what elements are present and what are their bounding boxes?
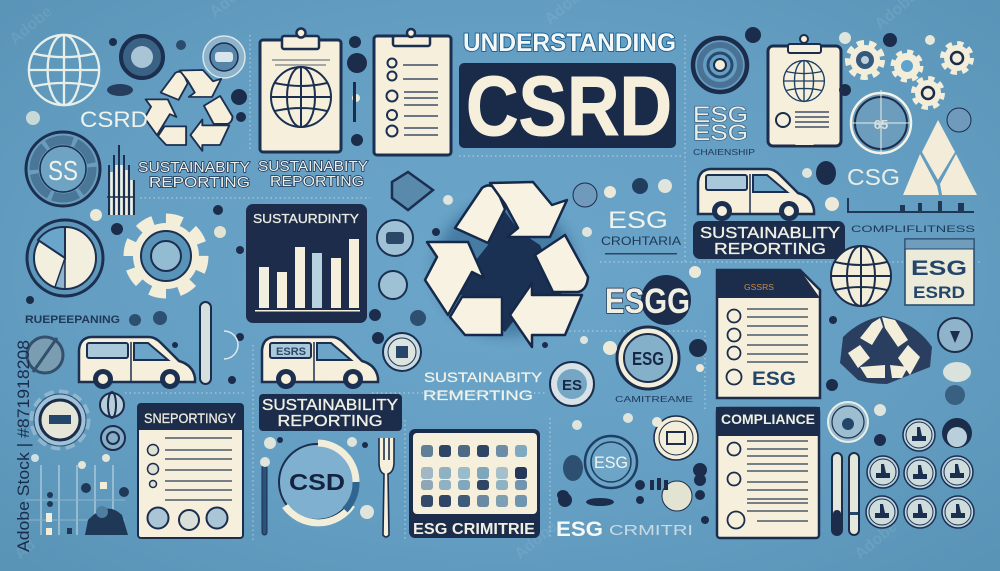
text: sustainabity remerting: REMERTING <box>423 388 533 403</box>
label: CSG: CSG <box>847 164 900 190</box>
icon: lower-left swirls <box>100 392 125 450</box>
text: sustainabity remerting: SUSTAINABITY <box>424 370 542 385</box>
icon: wireframe globe <box>29 35 99 105</box>
icon: ESG outline circle <box>585 436 637 488</box>
icon: large recycle <box>425 182 588 347</box>
icon: dark recycle blob <box>840 316 932 384</box>
text: sustainability reporting 1 <box>138 159 250 191</box>
panel: sustainability bar chart <box>246 204 367 323</box>
icon: crossed circle <box>27 337 63 373</box>
small text: distorted caption left: RUEPEEPANING <box>25 314 120 326</box>
panel: clipboard with globe <box>260 28 341 152</box>
icon: pill marker <box>200 302 267 535</box>
panel: compliance document: COMPLIANCE <box>721 412 815 427</box>
icon: lower-left gear <box>33 393 87 447</box>
icon: triangles <box>903 120 977 195</box>
title panel: CSRD: CSRD <box>466 59 672 153</box>
badge column near chart <box>377 172 433 371</box>
label: sustainability reporting 4 <box>693 221 845 259</box>
label: sustainability reporting 3 <box>259 394 402 431</box>
dotted section dividers <box>125 35 980 540</box>
icon: ESG outline circle: ESG <box>594 453 628 472</box>
icon: gear cluster <box>848 43 971 107</box>
icon: pie chart <box>27 220 103 296</box>
watermark: Adobe <box>852 518 901 563</box>
label: sustainability reporting 3: SUSTAINABILITY <box>262 397 398 414</box>
icon: ESG ring <box>617 327 679 389</box>
icon: cream badges <box>654 416 698 511</box>
icon: van 3 <box>698 169 814 221</box>
panel: ESG criteria calendar <box>409 429 540 538</box>
watermark: Adobe <box>7 3 56 48</box>
label: ESCG badge <box>605 275 691 325</box>
title: understanding: UNDERSTANDING <box>463 29 676 57</box>
panel: reporting document: SNEPORTINGY <box>144 411 236 426</box>
icon: vertical pills <box>832 453 859 535</box>
icon: ES badge: ES <box>562 377 582 394</box>
panel: ESG ESRD card: ESRD <box>913 283 965 302</box>
panel: clipboard checklist <box>374 29 451 155</box>
panel: reporting document <box>138 404 243 538</box>
source credit: Adobe Stock | #871918208 <box>14 340 33 552</box>
icon: gear <box>129 219 203 293</box>
text: sustainability reporting 1: REPORTING <box>149 174 250 191</box>
text: ESG crmitri: CRMITRI <box>609 523 693 539</box>
text: stacked ESG: ESG <box>693 102 748 127</box>
icon: van 2 <box>262 337 378 389</box>
text: stacked ESG <box>693 102 755 157</box>
panel: ESG criteria calendar: ESG CRIMITRIE <box>413 521 535 538</box>
icon: van 2: ESRS <box>276 346 306 358</box>
watermark: Adobe <box>512 518 561 563</box>
panel: ESG document: ESG <box>752 369 796 390</box>
chart bars <box>255 239 360 312</box>
icon: ES badge <box>550 362 594 406</box>
icon: small recycle <box>145 70 233 151</box>
small text and bars right: COMPLIFLITNESS <box>851 224 975 234</box>
icon: crosshair circle: 65 <box>874 117 888 132</box>
text: sustainability reporting 2: REPORTING <box>270 173 364 190</box>
small text and bars right <box>847 198 975 234</box>
icon: fork <box>379 438 394 537</box>
text: sustainabity remerting <box>423 370 542 403</box>
panel: sustainability bar chart: SUSTAURDINTY <box>253 212 360 226</box>
icon: ESG ring: ESG <box>632 349 664 369</box>
text: stacked ESG: CHAIENSHIP <box>693 148 755 157</box>
label: CSRD: CSRD <box>80 107 148 132</box>
icon: right badges <box>828 318 972 448</box>
panel: tablet with globe <box>768 35 841 146</box>
label: sustainability reporting 3: REPORTING <box>278 413 382 430</box>
panel: ESG ESRD card <box>905 239 974 305</box>
panel: compliance document <box>716 407 820 538</box>
text: ESG criteria cluster: CROHTARIA <box>601 234 681 248</box>
label: sustainability reporting 4: REPORTING <box>714 241 826 258</box>
lower-left chart clutter <box>25 454 129 535</box>
icon: crosshair circle <box>850 90 912 155</box>
icon: globe <box>831 246 891 306</box>
icon: CSD ring: CSD <box>289 469 345 495</box>
icon: CSD ring <box>279 443 356 523</box>
panel: ESG document <box>717 270 820 398</box>
icon: thumb badge grid <box>866 419 974 528</box>
text: sustainability reporting 2: SUSTAINABITY <box>258 158 368 175</box>
panel: ESG ESRD card: ESG <box>911 257 967 280</box>
text: ESG crmitri: ESG <box>556 518 603 541</box>
label: sustainability reporting 4: SUSTAINABLITY <box>700 225 840 242</box>
text: ESG criteria cluster: ESG <box>608 207 668 234</box>
small text: commitment line: CAMITREAME <box>615 395 693 404</box>
label: ESCG badge: ESGG <box>605 282 690 321</box>
text: sustainability reporting 2 <box>258 158 368 190</box>
icon: dark badge <box>121 36 163 78</box>
text: ESG criteria cluster <box>601 207 681 254</box>
icon: van 1 <box>79 337 195 389</box>
icon: SS dial: SS <box>48 155 78 186</box>
icon: target rings <box>693 38 747 92</box>
icon: tall bars <box>107 145 135 215</box>
icon: light badge <box>203 36 245 78</box>
text: stacked ESG: ESG <box>693 120 748 145</box>
panel: ESG document: GSSRS <box>744 283 774 292</box>
text: ESG crmitri <box>556 518 693 541</box>
watermark: Ad <box>12 536 39 563</box>
text: sustainability reporting 1: SUSTAINABITY <box>138 159 250 176</box>
icon: SS dial <box>26 132 100 206</box>
